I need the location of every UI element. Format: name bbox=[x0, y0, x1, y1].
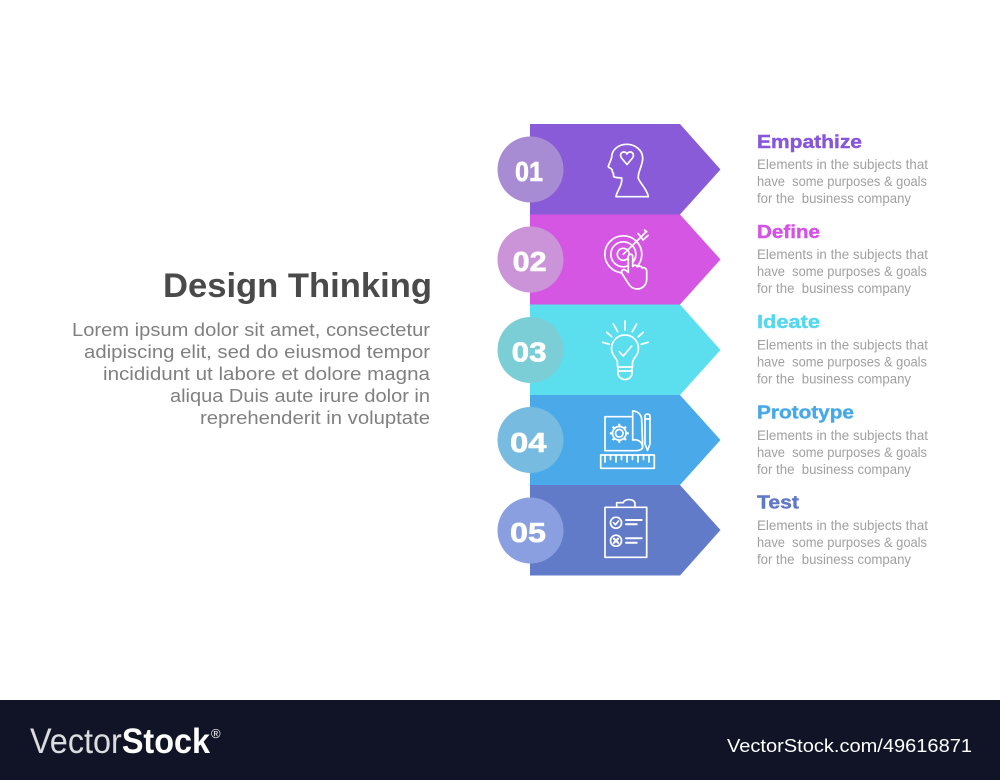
description: define: have some purposes & goals bbox=[757, 263, 927, 279]
title: Design Thinking bbox=[163, 267, 432, 305]
description: define: Define bbox=[757, 221, 820, 242]
description: empathize: Elements in the subjects that bbox=[757, 156, 928, 172]
description: empathize: have some purposes & goals bbox=[757, 173, 927, 189]
footer image id: VectorStock.com/49616871 bbox=[727, 735, 972, 756]
description: define: for the business company bbox=[757, 280, 911, 296]
description: ideate: Ideate bbox=[757, 311, 820, 332]
arrow 05 bbox=[530, 485, 720, 576]
body text: adipiscing elit, sed do eiusmod tempor bbox=[84, 341, 430, 362]
number badge 05 bbox=[498, 498, 564, 564]
number badge 02: 02 bbox=[513, 246, 547, 277]
icon: light bulb with check bbox=[603, 321, 648, 380]
body text: incididunt ut labore et dolore magna bbox=[103, 363, 431, 384]
number badge 01: 01 bbox=[515, 156, 543, 187]
description: ideate: have some purposes & goals bbox=[757, 354, 927, 370]
description: prototype: Elements in the subjects that bbox=[757, 427, 928, 443]
description: prototype: have some purposes & goals bbox=[757, 444, 927, 460]
description: define bbox=[757, 221, 928, 296]
number badge 01 bbox=[498, 136, 564, 202]
arrow 02 bbox=[530, 214, 720, 304]
body text: reprehenderit in voluptate bbox=[200, 407, 430, 428]
description: define: Elements in the subjects that bbox=[757, 246, 928, 262]
number badge 04: 04 bbox=[510, 427, 547, 458]
description: empathize: for the business company bbox=[757, 190, 911, 206]
description: test: Test bbox=[757, 492, 799, 512]
body text bbox=[72, 319, 431, 428]
number badge 05: 05 bbox=[510, 517, 546, 548]
description: test: for the business company bbox=[757, 551, 911, 567]
arrow 03 bbox=[530, 304, 720, 395]
number badge 04 bbox=[498, 407, 564, 473]
description: test: have some purposes & goals bbox=[757, 534, 927, 550]
icon: head with heart bbox=[608, 144, 648, 197]
icon: clipboard checklist bbox=[605, 500, 647, 557]
description: empathize: Empathize bbox=[757, 131, 862, 152]
arrow 04 bbox=[530, 395, 720, 485]
footer band bbox=[0, 700, 1000, 780]
body text: Lorem ipsum dolor sit amet, consectetur bbox=[72, 319, 430, 340]
description: empathize bbox=[757, 131, 928, 206]
description: prototype bbox=[757, 402, 928, 477]
description: test bbox=[757, 492, 928, 567]
number badge 03: 03 bbox=[512, 336, 547, 368]
footer logo: VectorStock bbox=[30, 722, 210, 761]
body text: aliqua Duis aute irure dolor in bbox=[170, 385, 430, 406]
registered mark: ® bbox=[211, 726, 221, 741]
icon: blueprint, gear, ruler and pencil bbox=[601, 411, 654, 468]
icon: target with hand bbox=[605, 230, 648, 289]
step 02: define bbox=[498, 214, 928, 304]
step 04: prototype bbox=[498, 395, 928, 485]
description: prototype: Prototype bbox=[757, 402, 854, 422]
description: prototype: for the business company bbox=[757, 461, 911, 477]
description: ideate: Elements in the subjects that bbox=[757, 336, 928, 352]
step 05: test bbox=[498, 485, 928, 576]
arrow 01 bbox=[530, 124, 720, 214]
step 03: ideate bbox=[498, 304, 928, 395]
number badge 03 bbox=[498, 317, 564, 383]
panel: left introduction bbox=[72, 267, 432, 428]
description: ideate: for the business company bbox=[757, 370, 911, 386]
description: test: Elements in the subjects that bbox=[757, 517, 928, 533]
number badge 02 bbox=[498, 226, 564, 292]
step 01: empathize bbox=[498, 124, 928, 214]
description: ideate bbox=[757, 311, 928, 386]
